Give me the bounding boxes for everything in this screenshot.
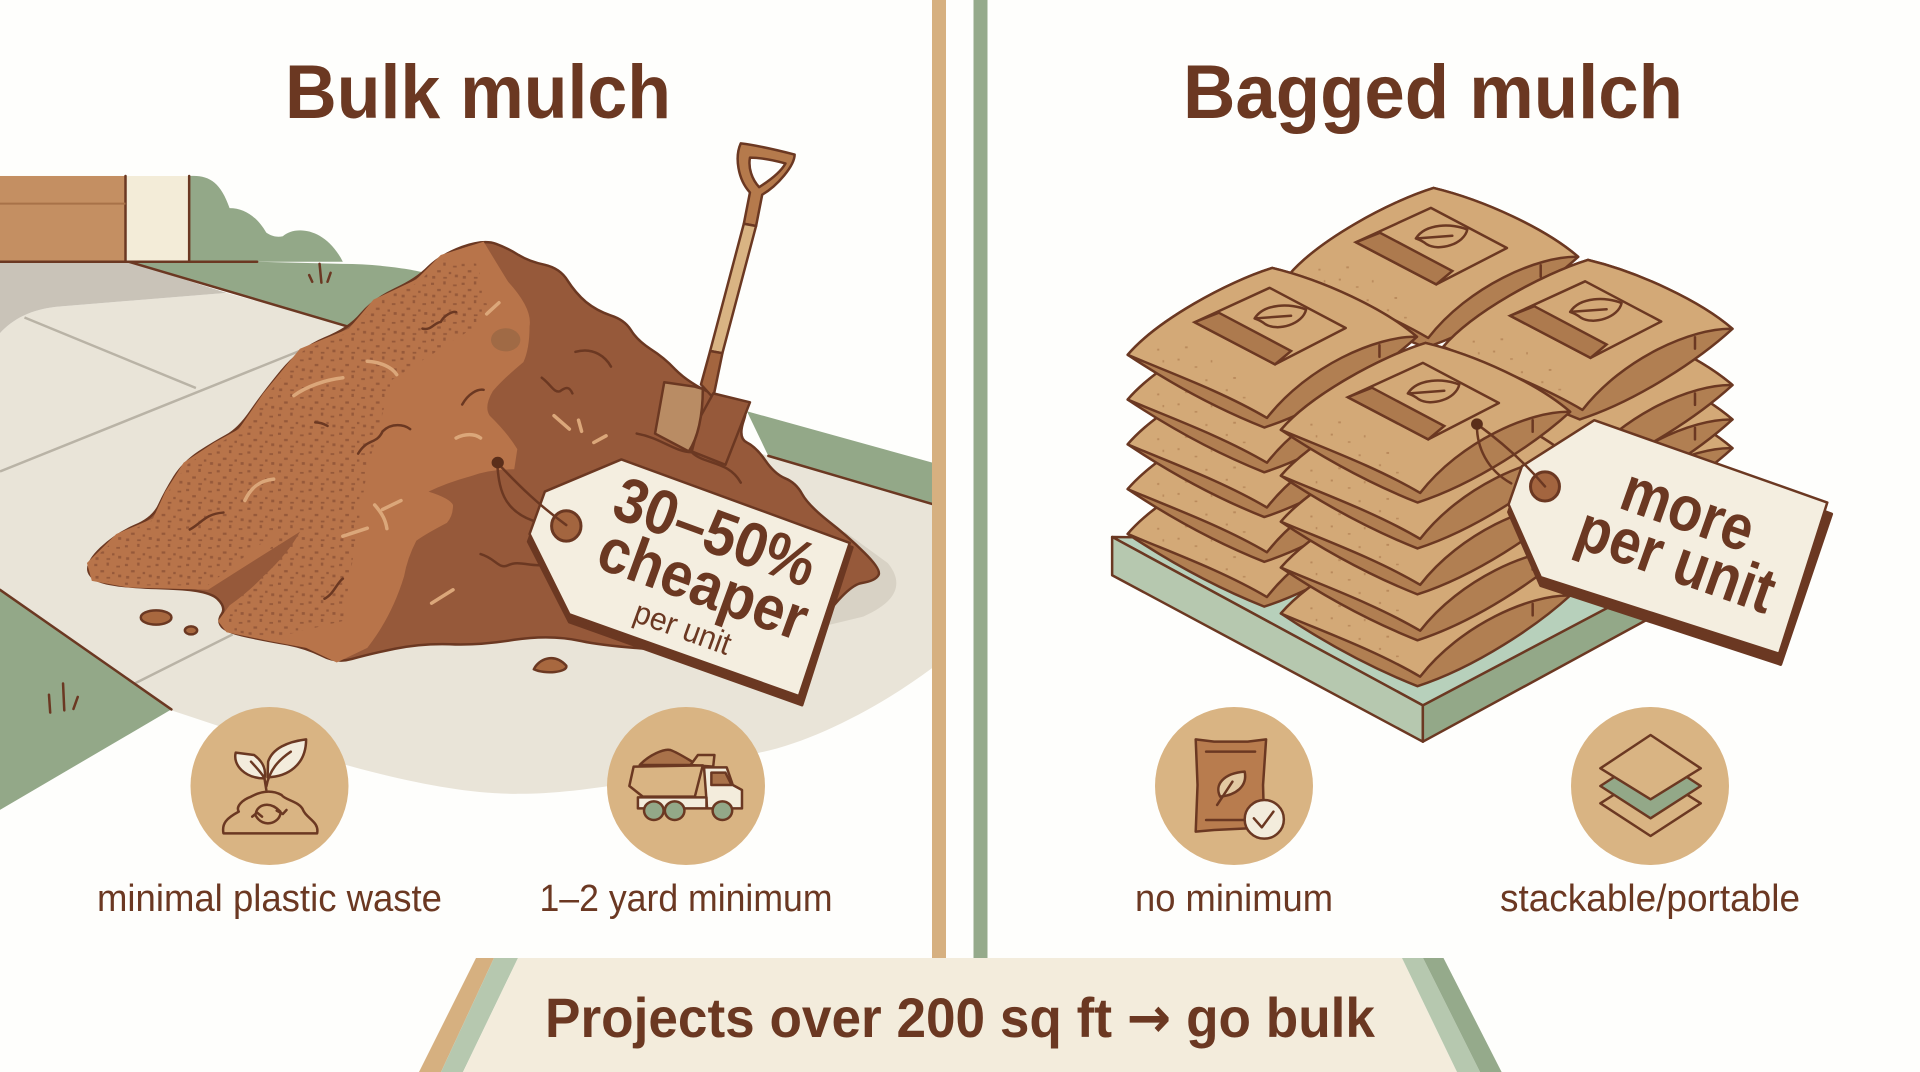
left bag 2 <box>1128 313 1417 472</box>
right bag 2 <box>1443 316 1732 476</box>
front lawn edge <box>0 590 171 709</box>
shovel blade light <box>655 382 703 451</box>
bottom layer <box>1600 772 1701 836</box>
tag body <box>1509 420 1827 654</box>
right stack <box>1443 260 1732 539</box>
pallet top <box>1112 537 1648 705</box>
tag shadow <box>528 467 852 705</box>
icon: sprout on recycle mound <box>223 739 317 833</box>
bag <box>1196 739 1266 832</box>
chassis <box>638 797 706 808</box>
left bag 1 <box>1128 268 1417 428</box>
mulch pile <box>87 242 879 663</box>
top layer <box>1600 735 1701 799</box>
tuft back <box>309 264 331 283</box>
garage door <box>0 176 126 262</box>
right bag 1 <box>1443 260 1732 419</box>
banner text: Projects over 200 sq ft → go bulk <box>545 986 1376 1051</box>
illustration: mulch pile on driveway <box>0 143 932 810</box>
pile squiggles <box>190 312 741 599</box>
front bag 1 <box>1281 343 1570 503</box>
right bag label <box>1510 281 1661 358</box>
back lawn <box>132 262 429 329</box>
tag string <box>497 463 566 525</box>
left bag label <box>1195 288 1346 364</box>
driveway joints <box>0 317 355 684</box>
panel: bagged mulch <box>1112 50 1832 920</box>
front bag 2 <box>1281 389 1570 548</box>
pallet <box>1112 537 1648 742</box>
clod three <box>534 658 566 672</box>
tag text: cheaper: cheaper <box>589 514 818 654</box>
concrete driveway <box>0 293 932 794</box>
wheel three <box>713 801 732 820</box>
tag string <box>1477 424 1545 486</box>
mound <box>223 792 317 833</box>
tuft front <box>49 684 78 713</box>
title: bagged mulch: Bagged mulch <box>1183 50 1683 135</box>
feature: minimal plastic waste <box>97 707 442 920</box>
bag lines <box>1206 752 1255 820</box>
panel: bulk mulch <box>0 50 932 920</box>
front bag 3 <box>1281 435 1570 594</box>
check mark <box>1254 812 1273 827</box>
label: stackable/portable <box>1500 878 1800 920</box>
clod two <box>185 626 197 634</box>
driveway shadow <box>0 262 227 333</box>
shovel shaft <box>710 224 756 353</box>
left leaf <box>235 753 265 778</box>
wheel two <box>665 801 684 820</box>
wheel one <box>644 801 664 820</box>
feature: yard minimum <box>540 707 832 920</box>
divider green <box>974 0 988 958</box>
title: bulk mulch: Bulk mulch <box>285 50 671 135</box>
front lawn <box>0 590 171 810</box>
mulch load <box>640 750 698 765</box>
tag text: per unit: per unit <box>1568 491 1785 627</box>
tag text: per unit: per unit <box>629 593 736 662</box>
front bag 5 <box>1281 527 1570 686</box>
front stack <box>1281 343 1570 686</box>
cab <box>704 767 742 808</box>
pile light face <box>87 242 530 663</box>
cab window <box>711 773 732 785</box>
icon: bag with check <box>1196 739 1284 839</box>
pile dark body <box>88 242 879 661</box>
tag body <box>530 459 850 696</box>
feature: no minimum <box>1135 707 1333 920</box>
icon: stacked layers <box>1600 735 1701 836</box>
string pin <box>492 457 504 468</box>
building outlines <box>0 176 257 262</box>
lawn right <box>747 411 932 504</box>
pile chips <box>245 303 606 603</box>
right bag 3 <box>1443 351 1732 510</box>
lawn edge back <box>129 262 355 329</box>
icon: dump truck <box>629 750 742 820</box>
label: no minimum <box>1135 878 1333 920</box>
right leaf <box>268 739 306 777</box>
bag leaf <box>1218 772 1245 797</box>
front bag 4 <box>1281 481 1570 640</box>
left bag 4 <box>1128 402 1417 562</box>
clod one <box>141 610 171 625</box>
pile speckle <box>89 259 490 639</box>
shovel grip <box>738 143 795 226</box>
tag text: 30-50%: 30–50% <box>605 463 826 601</box>
right bag 4 <box>1443 379 1732 539</box>
banner tan ribbon <box>419 958 494 1072</box>
banner body <box>463 958 1457 1072</box>
circle badge <box>1571 707 1729 865</box>
back bag label <box>1356 208 1507 284</box>
tag text: more: more <box>1612 453 1764 566</box>
pile stone <box>491 328 520 351</box>
pile ground shadow <box>826 532 896 626</box>
price tag: more <box>1471 418 1832 664</box>
left bag 5 <box>1128 447 1417 607</box>
recycle arrows <box>252 805 287 823</box>
left stack <box>1128 268 1417 607</box>
pallet left face <box>1112 537 1423 742</box>
lawn edge right <box>768 456 932 504</box>
truck bed <box>629 765 703 797</box>
circle badge <box>1155 707 1313 865</box>
label: minimal plastic waste <box>97 878 442 920</box>
circle badge <box>190 707 348 865</box>
banner green ribbon right <box>1402 958 1480 1072</box>
tag hole <box>552 511 581 541</box>
string pin <box>1471 418 1483 430</box>
tag hole <box>1531 472 1559 501</box>
shovel <box>655 143 795 465</box>
back stack <box>1289 188 1578 348</box>
front bag label <box>1348 363 1499 439</box>
tag shadow <box>1509 428 1832 664</box>
bed flap <box>691 755 714 767</box>
banner green ribbon left <box>441 958 518 1072</box>
middle layer <box>1600 753 1701 818</box>
illustration: pallet of bags <box>1112 188 1832 742</box>
feature: stackable <box>1500 707 1800 920</box>
check badge <box>1245 800 1284 839</box>
divider tan <box>932 0 946 958</box>
stem <box>251 752 291 790</box>
garage seam <box>0 203 126 205</box>
house wall <box>126 176 189 262</box>
wheels <box>644 801 732 820</box>
clods <box>141 610 566 672</box>
circle badge <box>607 707 765 865</box>
label: 1–2 yard minimum <box>540 878 832 920</box>
price tag: cheaper <box>492 457 852 705</box>
hedge <box>189 176 343 262</box>
shovel socket <box>701 351 722 398</box>
back bag <box>1289 188 1578 348</box>
left bag 3 <box>1128 357 1417 517</box>
bottom banner <box>419 958 1502 1072</box>
leaf stem <box>1217 782 1232 805</box>
shovel blade dark <box>692 393 750 465</box>
banner dark green ribbon right <box>1423 958 1502 1072</box>
pallet right face <box>1423 608 1648 742</box>
center divider <box>932 0 988 958</box>
